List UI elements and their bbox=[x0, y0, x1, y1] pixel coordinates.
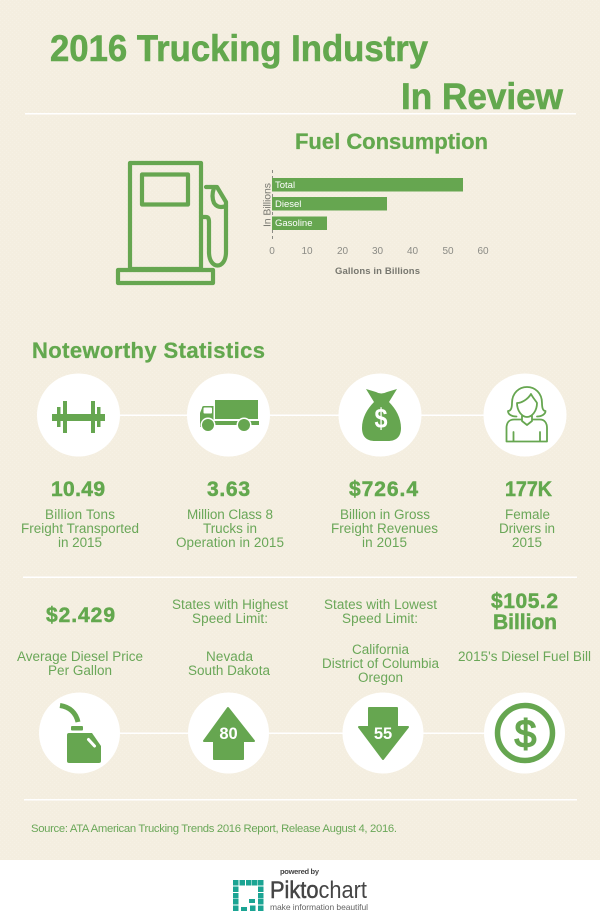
stat: lowest speed limit bbox=[322, 597, 439, 774]
x axis ticks: 30 bbox=[372, 246, 383, 257]
icon: money bag bbox=[362, 389, 401, 441]
bar: diesel bbox=[272, 197, 387, 210]
title: In Review bbox=[401, 76, 563, 117]
stat: freight revenues: in 2015 bbox=[362, 535, 407, 550]
stat: highest speed limit: South Dakota bbox=[188, 663, 270, 678]
stat: lowest speed limit: States with Lowest bbox=[324, 597, 437, 612]
stat: freight revenues: Freight Revenues bbox=[331, 521, 438, 536]
stat: diesel fuel bill: 2015's Diesel Fuel Bill bbox=[458, 649, 591, 664]
stat: freight revenues: Billion in Gross bbox=[340, 507, 430, 522]
bar: total: Total bbox=[275, 180, 295, 191]
stat: diesel fuel bill: Billion bbox=[493, 611, 557, 634]
stat: freight tons: Freight Transported bbox=[21, 521, 139, 536]
stat: female drivers: 2015 bbox=[512, 535, 542, 550]
stat: lowest speed limit: Oregon bbox=[358, 670, 403, 685]
icon: fuel can bbox=[60, 706, 101, 763]
stat: diesel price: $2.429 bbox=[46, 604, 115, 627]
stat: freight tons bbox=[21, 374, 139, 550]
bar: gasoline: Gasoline bbox=[275, 218, 312, 229]
footer: Piktochart branding: make information beautiful bbox=[270, 902, 368, 912]
heading: Noteworthy Statistics: Noteworthy Statistics bbox=[32, 338, 265, 363]
stat: class 8 trucks: 3.63 bbox=[207, 478, 250, 501]
source note: Source: ATA American Trucking Trends 2016 Report, Release August 4, 2016. bbox=[31, 823, 397, 835]
stat: lowest speed limit: Speed Limit: bbox=[342, 611, 418, 626]
stat: female drivers: 177K bbox=[505, 478, 552, 501]
x axis ticks: 10 bbox=[301, 246, 313, 257]
icon: fuel pump bbox=[118, 163, 226, 283]
axis label: Gallons in Billions: Gallons in Billions bbox=[335, 266, 420, 277]
stat: freight revenues: $726.4 bbox=[349, 478, 418, 501]
stat: diesel fuel bill: $105.2 bbox=[491, 590, 558, 613]
stat: class 8 trucks: Trucks in bbox=[203, 521, 257, 536]
bar: total bbox=[272, 178, 463, 192]
title bbox=[50, 28, 563, 117]
bar: diesel: Diesel bbox=[275, 199, 301, 210]
stat: highest speed limit bbox=[172, 597, 288, 774]
stat: lowest speed limit: District of Columbia bbox=[322, 656, 439, 671]
icon: down arrow 55 bbox=[359, 708, 408, 759]
stat: freight tons: in 2015 bbox=[58, 535, 102, 550]
bar: gasoline bbox=[272, 216, 327, 230]
axis label: In Billions: In Billions bbox=[262, 183, 274, 227]
stat: diesel price: Average Diesel Price bbox=[17, 649, 143, 664]
heading: Fuel Consumption: Fuel Consumption bbox=[295, 129, 488, 154]
stat: diesel price: Per Gallon bbox=[48, 663, 112, 678]
stat: class 8 trucks bbox=[176, 374, 284, 550]
footer: Piktochart branding: powered by bbox=[280, 867, 320, 876]
stat: lowest speed limit: California bbox=[352, 642, 409, 657]
stat: female drivers bbox=[484, 374, 566, 550]
icon: truck bbox=[200, 400, 259, 432]
stat: freight tons: 10.49 bbox=[51, 478, 105, 501]
icon: up arrow 80 bbox=[204, 708, 254, 759]
bar chart: fuel consumption bbox=[262, 170, 489, 277]
stat: freight revenues bbox=[331, 374, 438, 550]
icon: money bag: $ bbox=[374, 403, 388, 434]
icon: woman driver bbox=[506, 387, 547, 442]
icon: dollar coin: $ bbox=[515, 713, 537, 756]
stat: class 8 trucks: Million Class 8 bbox=[187, 507, 273, 522]
stat: highest speed limit: Nevada bbox=[206, 649, 253, 664]
icon: dollar coin bbox=[498, 706, 552, 760]
title: 2016 Trucking Industry bbox=[50, 28, 428, 69]
stat: highest speed limit: Speed Limit: bbox=[192, 611, 268, 626]
x axis ticks bbox=[269, 246, 489, 257]
stat: class 8 trucks: Operation in 2015 bbox=[176, 535, 284, 550]
icon: barbell bbox=[52, 401, 105, 433]
x axis ticks: 40 bbox=[407, 246, 418, 257]
stat: female drivers: Drivers in bbox=[499, 521, 555, 536]
footer: Piktochart branding bbox=[233, 867, 368, 912]
footer: Piktochart branding: Piktochart bbox=[270, 877, 367, 904]
x axis ticks: 0 bbox=[269, 246, 275, 257]
stat: diesel fuel bill bbox=[458, 590, 591, 774]
icon: up arrow 80: 80 bbox=[219, 725, 238, 743]
stat: freight tons: Billion Tons bbox=[45, 507, 115, 522]
x axis ticks: 50 bbox=[442, 246, 454, 257]
stat: female drivers: Female bbox=[505, 507, 550, 522]
x axis ticks: 20 bbox=[337, 246, 348, 257]
stat: diesel price bbox=[17, 604, 143, 774]
icon: Piktochart logo bbox=[233, 880, 264, 911]
x axis ticks: 60 bbox=[477, 246, 489, 257]
icon: down arrow 55: 55 bbox=[374, 725, 392, 743]
stat: highest speed limit: States with Highest bbox=[172, 597, 288, 612]
